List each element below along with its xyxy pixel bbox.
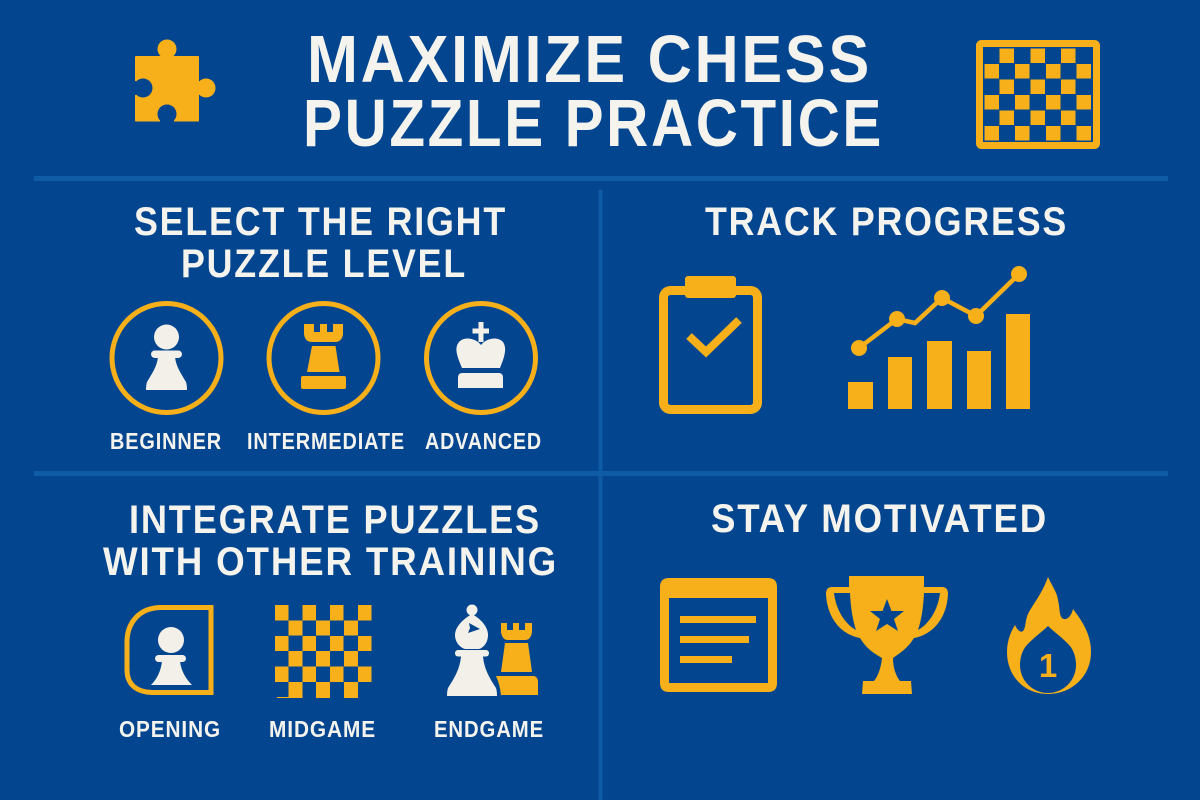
heading: select level: SELECT THE RIGHT (134, 200, 507, 244)
label: advanced: ADVANCED (425, 428, 542, 454)
icon: puzzle piece (133, 40, 216, 124)
heading: integrate puzzles: WITH OTHER TRAINING (103, 540, 558, 584)
heading: stay motivated: STAY MOTIVATED (711, 497, 1048, 541)
icon: clipboard with check (664, 276, 758, 410)
icon: opening pawn card (127, 608, 211, 692)
heading: select level (134, 200, 507, 286)
icon: endgame bishop and rook (447, 604, 538, 696)
heading: integrate puzzles: INTEGRATE PUZZLES (129, 498, 541, 542)
icon: intermediate rook (269, 304, 378, 412)
heading: integrate puzzles (103, 498, 558, 584)
panel: select the right puzzle level (110, 200, 542, 454)
chart: bars with rising line (848, 266, 1030, 409)
icon: beginner pawn (112, 304, 221, 412)
icon: chessboard (980, 44, 1096, 146)
panel: stay motivated (660, 497, 1091, 694)
panel: track progress (664, 200, 1068, 410)
icon: flame with streak number (1007, 577, 1091, 694)
label: beginner: BEGINNER (110, 428, 222, 454)
icon: flame with streak number: 1 (1039, 647, 1057, 684)
title: MAXIMIZE CHESS (307, 22, 872, 97)
title (303, 22, 884, 161)
label: endgame: ENDGAME (434, 716, 544, 742)
icon: trophy with star (826, 576, 948, 694)
label: opening: OPENING (119, 716, 221, 742)
heading: select level: PUZZLE LEVEL (181, 242, 467, 286)
icon: calendar window (660, 578, 777, 692)
heading: track progress: TRACK PROGRESS (705, 200, 1068, 244)
label: intermediate: INTERMEDIATE (247, 428, 405, 454)
label: midgame: MIDGAME (269, 716, 376, 742)
panel: integrate puzzles with other training (103, 498, 558, 742)
icon: midgame checkerboard (275, 605, 372, 698)
icon: advanced king (426, 304, 536, 412)
title: PUZZLE PRACTICE (303, 86, 884, 161)
